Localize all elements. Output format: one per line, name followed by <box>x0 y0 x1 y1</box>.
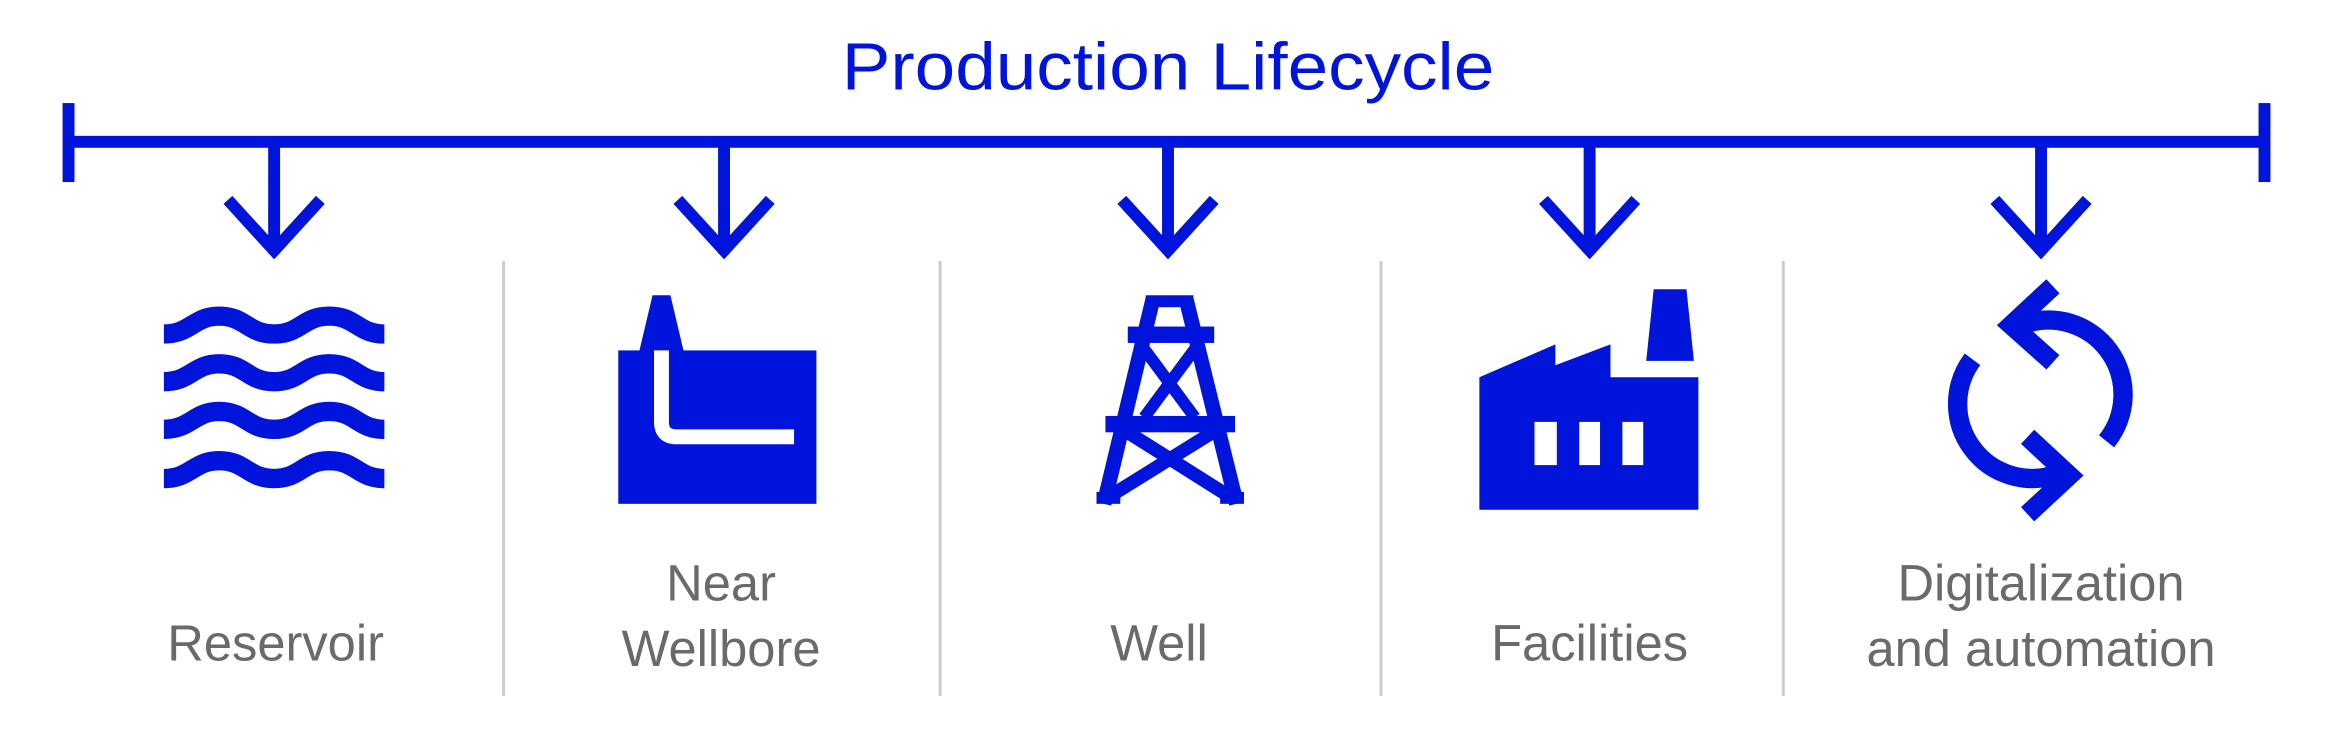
label: well: Well <box>1110 614 1208 671</box>
label: reservoir: Reservoir <box>167 614 384 671</box>
icon: reservoir waves <box>164 316 384 479</box>
label: facilities: Facilities <box>1491 614 1688 671</box>
icon: well derrick <box>1096 295 1244 504</box>
timeline bar <box>63 103 2270 182</box>
icon: near wellbore <box>618 295 816 504</box>
arrow: well <box>1122 142 1214 254</box>
arrow: near wellbore <box>678 142 770 254</box>
arrow: reservoir <box>228 142 320 254</box>
label: digitalization and automation: Digitalization <box>1897 555 2185 612</box>
label: near wellbore: Wellbore <box>622 620 821 677</box>
title: Production Lifecycle <box>842 30 1494 105</box>
arrow: facilities <box>1543 142 1636 254</box>
icon: cycle arrows <box>1958 286 2123 514</box>
icon: factory <box>1479 289 1698 510</box>
label: near wellbore: Near <box>666 555 776 612</box>
label: digitalization and automation: and automation <box>1866 620 2216 677</box>
arrow: digitalization <box>1995 142 2087 254</box>
